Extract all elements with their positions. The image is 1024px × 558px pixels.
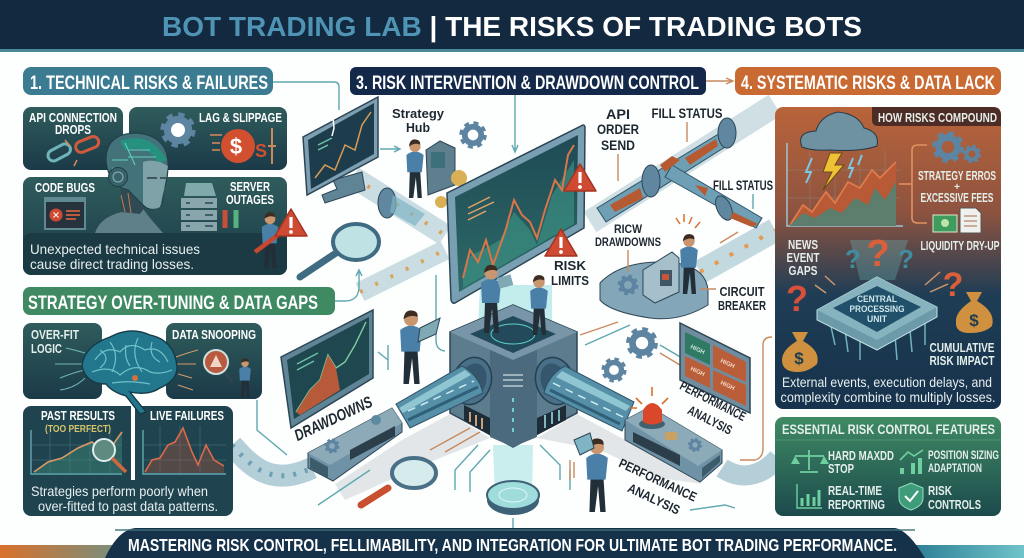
question marks — [786, 233, 963, 319]
card: API connection drops: API CONNECTION — [29, 111, 117, 125]
caption — [780, 374, 996, 405]
card: lag and slippage: $ — [230, 134, 242, 159]
right pipe and module — [530, 352, 722, 482]
panel: strategy over-tuning — [23, 323, 262, 516]
label: performance analysis lower: ANALYSIS — [625, 480, 683, 518]
labels: api order send and fill status: SEND — [601, 138, 635, 153]
panel 1 heading — [23, 67, 273, 95]
footer banner — [0, 528, 1024, 558]
labels: drawdowns and circuit breaker: CIRCUIT — [720, 284, 765, 299]
labels: drawdowns and circuit breaker: RICW — [614, 222, 643, 236]
caption: Unexpected technical issues — [30, 241, 200, 257]
panel: how risks compound — [775, 107, 1001, 409]
caption: External events, execution delays, and — [782, 374, 992, 390]
label: news event gaps — [786, 237, 820, 278]
event panel: HIGH — [689, 344, 705, 356]
panel 4 heading — [735, 67, 1001, 95]
label: drawdowns: DRAWDOWNS — [292, 394, 376, 445]
label: news event gaps: GAPS — [788, 263, 818, 278]
left pipe and module — [308, 352, 497, 481]
card: past results and live failures: Strategies perform poorly when — [31, 483, 208, 499]
chart — [787, 143, 903, 226]
event panel: HIGH — [689, 366, 705, 378]
feature: real-time reporting: REPORTING — [828, 498, 885, 512]
icon: money bags: $ — [969, 311, 979, 330]
feature: real-time reporting — [797, 484, 885, 512]
event panel — [680, 323, 750, 413]
tab — [872, 107, 1001, 126]
label: strategy hub: Strategy — [392, 106, 445, 121]
card: past results and live failures: over-fitted to past data patterns. — [38, 498, 218, 514]
panel: technical risks — [23, 107, 287, 275]
card: API connection drops: DROPS — [55, 123, 91, 137]
tab: HOW RISKS COMPOUND — [878, 111, 997, 125]
label: strategy hub: Hub — [406, 120, 430, 135]
icon: storm cloud — [801, 112, 877, 190]
card: code bugs and server outages: SERVER — [230, 180, 270, 194]
chip — [815, 272, 948, 360]
icon: brain — [82, 331, 177, 414]
monitor: strategy chart — [303, 97, 378, 203]
warning triangle — [275, 209, 307, 236]
card: lag and slippage: LAG & SLIPPAGE — [199, 110, 282, 125]
icon: gears — [934, 133, 980, 162]
label: news event gaps: EVENT — [786, 250, 820, 265]
feature: risk controls: RISK — [928, 484, 952, 498]
label: performance analysis upper: PERFORMANCE — [678, 378, 749, 424]
arrows — [899, 145, 927, 223]
light beam — [478, 285, 552, 497]
label: performance analysis upper: ANALYSIS — [685, 402, 735, 438]
circuit breaker platform — [600, 214, 708, 319]
connector lines and arrows — [257, 78, 772, 528]
labels: drawdowns and circuit breaker — [595, 222, 766, 313]
floor shadows — [335, 414, 702, 500]
icon: worker with wrench — [255, 212, 282, 268]
card: past results and live failures — [23, 406, 233, 516]
feature: hard maxdd stop — [791, 449, 894, 476]
label: cumulative risk impact: RISK IMPACT — [930, 354, 995, 368]
labels: drawdowns and circuit breaker: DRAWDOWNS — [595, 235, 661, 249]
card: data snooping: DATA SNOOPING — [172, 328, 256, 342]
top right pipe network — [597, 118, 762, 228]
label: strategy hub — [392, 106, 445, 135]
chip: PROCESSING — [850, 304, 904, 314]
label: cumulative risk impact: CUMULATIVE — [930, 341, 994, 355]
operator with tablet — [574, 433, 608, 512]
feature: real-time reporting: REAL-TIME — [828, 484, 882, 498]
icon: red siren — [630, 387, 668, 429]
card: over-fit logic: OVER-FIT — [31, 328, 79, 342]
panel 3 heading: 3. RISK INTERVENTION & DRAWDOWN CONTROL — [356, 73, 699, 94]
icon: money bags — [782, 292, 993, 372]
icon: cash and document — [933, 208, 981, 233]
question marks: ? — [866, 233, 890, 275]
labels: api order send and fill status: FILL STATUS — [713, 178, 773, 193]
question marks: ? — [943, 266, 963, 304]
base disc — [487, 481, 539, 515]
question marks: ? — [786, 278, 808, 319]
feature: hard maxdd stop: HARD MAXDD — [828, 449, 894, 463]
card: over-fit logic: LOGIC — [31, 342, 62, 356]
magnifier bottom — [361, 458, 436, 505]
question marks: ? — [845, 244, 861, 274]
card: data snooping — [166, 323, 262, 399]
drawdown monitor — [281, 310, 373, 428]
labels: api order send and fill status: FILL STATUS — [652, 106, 722, 121]
label: risk limits: RISK — [554, 259, 586, 273]
chip: CENTRAL — [857, 294, 897, 304]
data flow bands — [232, 105, 778, 476]
panel 2 heading — [23, 287, 335, 315]
analyst with tablet — [400, 310, 440, 384]
panel 1 heading: 1. TECHNICAL RISKS & FAILURES — [30, 73, 268, 94]
flanges — [378, 188, 425, 226]
feature: hard maxdd stop: STOP — [828, 462, 854, 476]
feature: position sizing adaptation: ADAPTATION — [928, 463, 982, 475]
feature: position sizing adaptation — [900, 450, 999, 475]
card: code bugs and server outages: CODE BUGS — [35, 180, 95, 195]
labels: api order send and fill status: ORDER — [597, 122, 639, 137]
card: code bugs and server outages: cause direct trading losses. — [30, 256, 194, 272]
operators on hub — [481, 265, 548, 335]
feature: position sizing adaptation: POSITION SIZING — [928, 450, 999, 462]
labels: api order send and fill status: API — [606, 107, 630, 122]
label: news event gaps: NEWS — [788, 237, 818, 252]
icon: robot head — [95, 133, 168, 233]
label: cumulative risk impact — [930, 341, 995, 368]
warning triangles — [545, 164, 596, 256]
card: lag and slippage: S — [255, 141, 267, 161]
card: past results and live failures: LIVE FAILURES — [150, 408, 224, 423]
icon: money bags: $ — [794, 349, 804, 368]
card: API connection drops — [23, 107, 123, 170]
labels: compounding factors: + — [954, 182, 960, 193]
gears — [603, 329, 656, 381]
card: lag and slippage — [129, 107, 287, 170]
title: BOT TRADING LAB | THE RISKS OF TRADING BOTS — [162, 11, 862, 42]
label: risk limits: LIMITS — [551, 274, 589, 288]
central hub block — [450, 305, 577, 447]
card: over-fit logic — [23, 323, 102, 399]
icon: magnifier top — [300, 224, 379, 277]
labels: api order send and fill status — [597, 106, 773, 243]
label: performance analysis lower: PERFORMANCE — [617, 455, 699, 505]
header banner — [0, 0, 1024, 52]
main monitor — [447, 125, 585, 303]
question marks: ? — [898, 244, 914, 274]
card: past results and live failures: PAST RESULTS — [41, 409, 115, 423]
card: code bugs and server outages: OUTAGES — [226, 193, 274, 207]
card: past results and live failures: (TOO PERFECT) — [45, 423, 111, 435]
panel: essential risk control features — [775, 417, 1001, 516]
event panel: HIGH — [719, 380, 735, 392]
panel 2 heading: STRATEGY OVER-TUNING & DATA GAPS — [28, 293, 318, 314]
chip: UNIT — [867, 314, 887, 324]
labels: drawdowns and circuit breaker: BREAKER — [718, 298, 766, 313]
feature: risk controls — [899, 483, 981, 512]
label: risk limits — [551, 259, 589, 288]
strategy hub operator and kiosk — [406, 123, 485, 208]
labels: compounding factors — [918, 169, 1000, 253]
feature: risk controls: CONTROLS — [928, 498, 981, 512]
panel 3 heading — [350, 67, 706, 95]
event panel: HIGH — [719, 358, 735, 370]
caption: complexity combine to multiply losses. — [780, 389, 996, 405]
card: code bugs and server outages — [23, 177, 287, 275]
